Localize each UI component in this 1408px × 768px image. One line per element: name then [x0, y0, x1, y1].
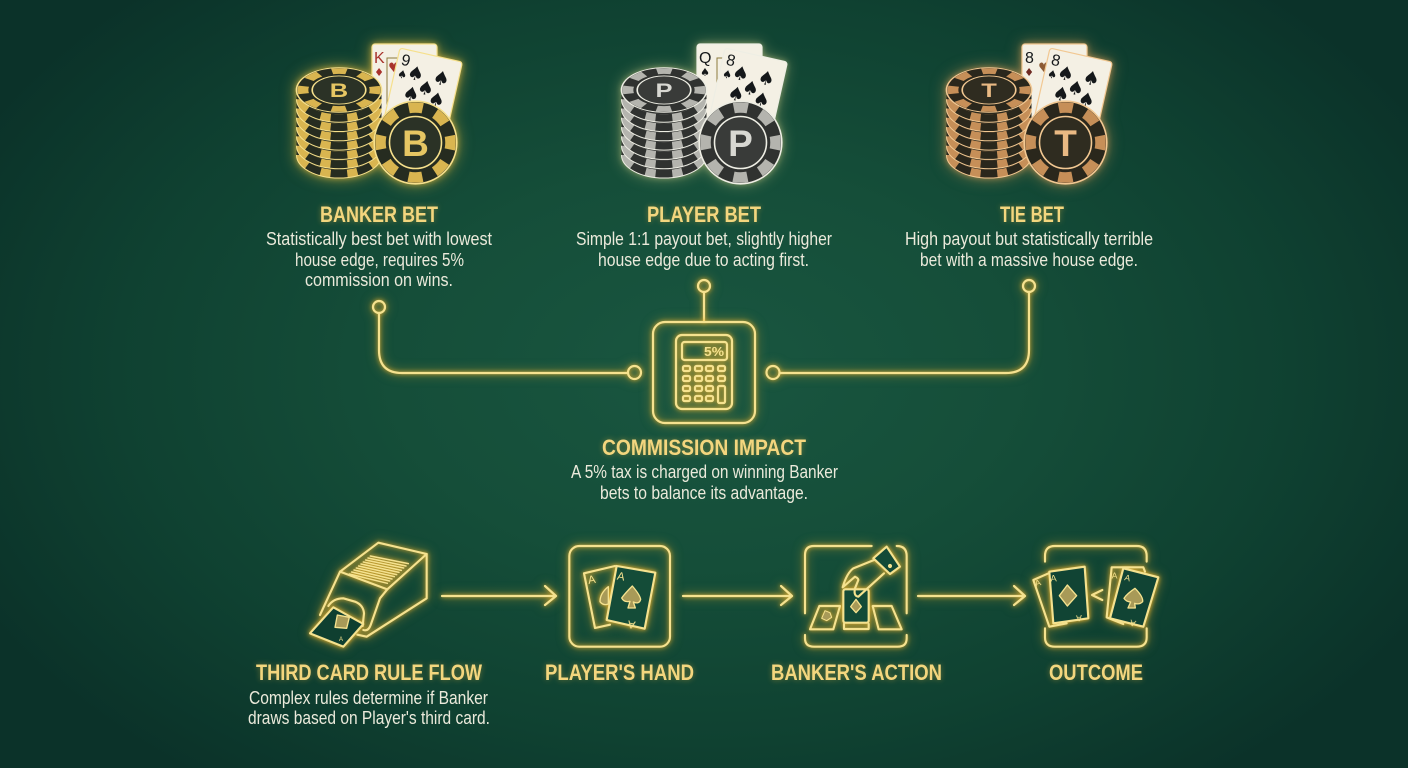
- heading: banker bet: BANKER BET: [320, 202, 438, 227]
- heading: tie bet: TIE BET: [1000, 202, 1064, 227]
- description: player bet: [576, 229, 832, 270]
- icon: outcome comparison: A: [1129, 617, 1137, 629]
- heading: commission impact: COMMISSION IMPACT: [602, 435, 806, 460]
- front card: eight of spades: 8: [725, 52, 737, 70]
- heading: outcome: OUTCOME: [1049, 660, 1143, 685]
- front card: nine of spades: ♠: [400, 82, 422, 107]
- front chip: B: [402, 123, 429, 164]
- connector: tie to commission: [766, 280, 1035, 379]
- icon: banker's action: [805, 546, 907, 647]
- front card: nine of spades: ♠: [396, 67, 408, 82]
- chip stack: [621, 68, 707, 178]
- icon: commission calculator: 5%: [704, 344, 724, 359]
- description: third card rule flow: [248, 688, 490, 728]
- description: third card rule flow: Complex rules determine if Banker: [249, 688, 488, 708]
- back card: king: ♦: [374, 66, 384, 79]
- front card: eight of spades: ♠: [1046, 67, 1058, 82]
- icon: outcome comparison: A: [1124, 572, 1132, 583]
- heading: banker's action: BANKER'S ACTION: [771, 660, 942, 685]
- description: commission impact: [571, 462, 838, 503]
- back card: eight of diamonds: ♥: [1038, 61, 1050, 76]
- icon: player chips and cards: [621, 44, 787, 184]
- description: tie bet: bet with a massive house edge.: [920, 250, 1138, 270]
- back card: queen: Q: [699, 50, 711, 67]
- arrow: banker's action to outcome: [918, 586, 1025, 605]
- description: third card rule flow: draws based on Player's third card.: [248, 708, 490, 728]
- chip stack: P: [655, 79, 673, 101]
- front card: nine of spades: ♠: [415, 76, 436, 101]
- heading: third card rule flow: THIRD CARD RULE FLOW: [256, 660, 482, 685]
- front card: eight of spades: [1029, 48, 1112, 156]
- description: player bet: Simple 1:1 payout bet, slightly higher: [576, 229, 832, 249]
- front card: eight of spades: ♠: [756, 66, 777, 91]
- icon: player's hand: A: [626, 618, 636, 631]
- front card: eight of spades: ♠: [721, 67, 733, 82]
- description: tie bet: High payout but statistically terrible: [905, 229, 1153, 249]
- front chip: [699, 101, 782, 184]
- back card: king: ♥: [388, 61, 400, 76]
- front card: eight of spades: ♠: [1050, 82, 1072, 107]
- front chip: [1024, 101, 1107, 184]
- icon: outcome comparison: [1033, 546, 1158, 647]
- front card: nine of spades: ♠: [431, 66, 452, 91]
- icon: tie chips and cards: [946, 44, 1112, 184]
- front card: eight of spades: ♠: [1065, 76, 1086, 101]
- panel: player bet: [576, 44, 832, 270]
- back card: eight of diamonds: 8: [1025, 50, 1034, 67]
- description: commission impact: A 5% tax is charged on winning Banker: [571, 462, 838, 482]
- icon: outcome comparison: A: [1034, 577, 1042, 589]
- front card: nine of spades: ♠: [405, 61, 426, 87]
- front chip: [374, 101, 457, 184]
- back card: eight of diamonds: ♦: [1024, 66, 1034, 79]
- panel: tie bet: [905, 44, 1153, 270]
- description: banker bet: Statistically best bet with lowest: [266, 229, 492, 249]
- description: banker bet: [266, 229, 492, 290]
- chip stack: [296, 68, 382, 178]
- front chip: P: [728, 123, 753, 164]
- icon: outcome comparison: A: [1076, 613, 1082, 623]
- description: banker bet: commission on wins.: [305, 270, 453, 290]
- icon: outcome comparison: A: [1112, 570, 1118, 580]
- heading: player bet: PLAYER BET: [647, 202, 761, 227]
- back card: king: [372, 44, 437, 134]
- icon: outcome comparison: A: [1050, 573, 1058, 584]
- arrow: player's hand to banker's action: [683, 586, 792, 605]
- front chip: T: [1054, 123, 1077, 164]
- chip stack: T: [981, 79, 997, 101]
- description: commission impact: bets to balance its advantage.: [600, 483, 808, 503]
- icon: player's hand: A: [616, 570, 626, 584]
- front card: nine of spades: [379, 48, 462, 156]
- icon: player's hand: [569, 546, 670, 647]
- back card: queen: ♠: [700, 66, 710, 79]
- description: player bet: house edge due to acting first.: [598, 250, 809, 270]
- icon: commission calculator: [653, 322, 755, 423]
- front card: eight of spades: ♠: [730, 61, 751, 87]
- front card: nine of spades: 9: [400, 52, 412, 70]
- panel: banker bet: [266, 44, 492, 290]
- chip stack: B: [330, 79, 348, 101]
- connector: banker to commission: [373, 301, 641, 379]
- back card: eight of diamonds: [1022, 44, 1087, 134]
- description: banker bet: house edge, requires 5%: [295, 250, 464, 270]
- icon: card shoe: A: [339, 637, 343, 643]
- icon: player's hand: A: [587, 574, 597, 587]
- chip stack: [946, 68, 1032, 178]
- back card: queen: [697, 44, 762, 134]
- arrow: shoe to player's hand: [442, 586, 556, 605]
- front card: eight of spades: [704, 48, 787, 156]
- icon: card shoe: [310, 543, 427, 647]
- connector: player to commission: [698, 280, 710, 322]
- front card: eight of spades: ♠: [740, 76, 761, 101]
- icon: banker chips and cards: [296, 44, 462, 184]
- back card: king: K: [374, 50, 385, 67]
- heading: player's hand: PLAYER'S HAND: [545, 660, 694, 685]
- front card: nine of spades: ♠: [426, 88, 447, 113]
- front card: eight of spades: ♠: [1055, 61, 1076, 87]
- front card: eight of spades: 8: [1050, 52, 1062, 70]
- front card: eight of spades: ♠: [1076, 88, 1097, 113]
- front card: eight of spades: ♠: [725, 82, 747, 107]
- description: tie bet: [905, 229, 1153, 270]
- front card: eight of spades: ♠: [751, 88, 772, 113]
- front card: eight of spades: ♠: [1081, 66, 1102, 91]
